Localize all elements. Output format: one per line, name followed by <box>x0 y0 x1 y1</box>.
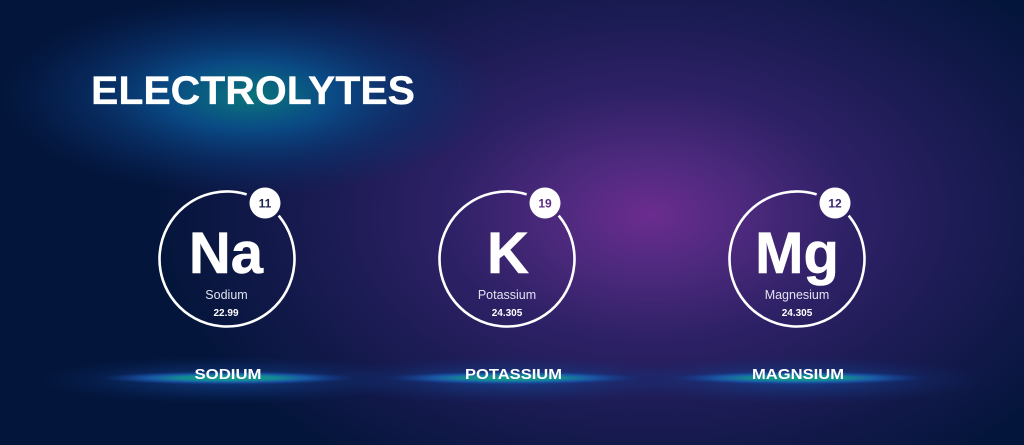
element card: sodium <box>132 164 322 354</box>
element name: Potassium <box>478 288 536 302</box>
element ring <box>412 164 602 354</box>
label: sodium: SODIUM <box>194 366 262 383</box>
atomic mass: 24.305 <box>782 308 813 319</box>
atomic mass: 24.305 <box>492 308 523 319</box>
element name: Magnesium <box>765 288 829 302</box>
element symbol: Na <box>189 221 264 286</box>
element symbol: K <box>487 221 529 286</box>
light flare: sodium <box>38 356 418 404</box>
label: magnesium: MAGNSIUM <box>752 366 844 383</box>
title glow <box>0 0 500 196</box>
label: potassium: POTASSIUM <box>465 366 562 383</box>
atomic number badge <box>530 188 560 218</box>
atomic number badge: 12 <box>828 196 842 210</box>
title: ELECTROLYTES <box>91 69 415 113</box>
atomic mass: 22.99 <box>213 308 239 319</box>
element name: Sodium <box>205 288 248 302</box>
element ring <box>132 164 322 354</box>
element card: potassium <box>412 164 602 354</box>
atomic number badge <box>820 188 850 218</box>
element symbol: Mg <box>755 221 839 286</box>
element ring <box>702 164 892 354</box>
element card: magnesium <box>702 164 892 354</box>
light flare: magnesium <box>608 356 988 404</box>
atomic number badge: 11 <box>259 196 272 210</box>
atomic number badge: 19 <box>538 196 552 210</box>
light flare: potassium <box>323 356 703 404</box>
atomic number badge <box>250 188 280 218</box>
